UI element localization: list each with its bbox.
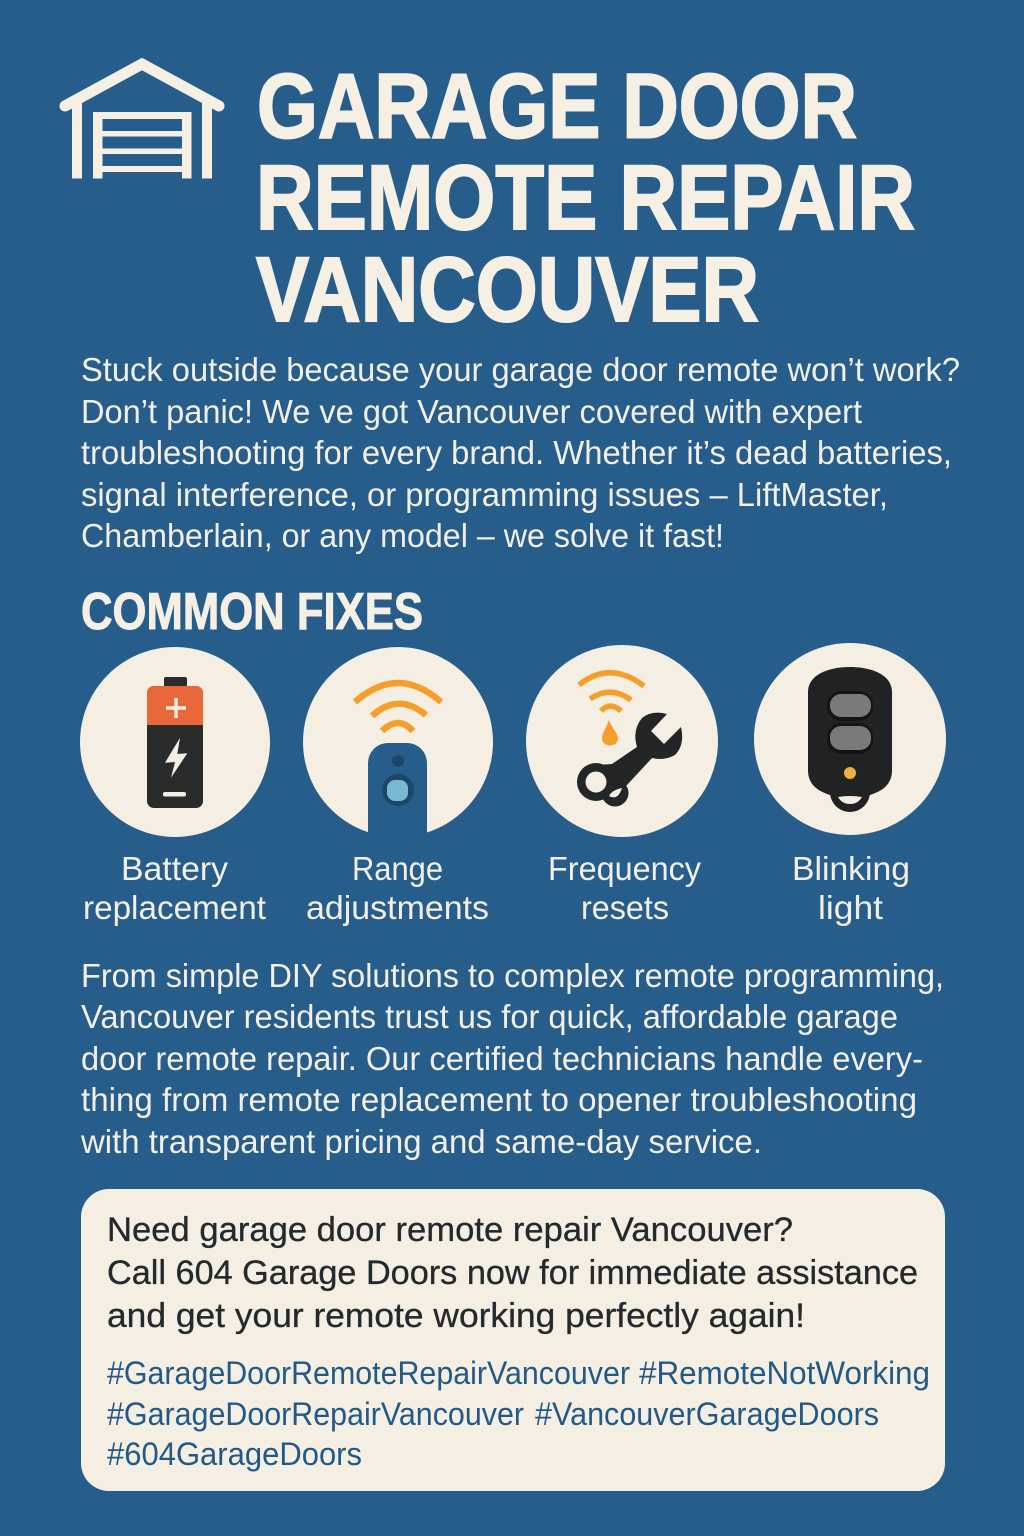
label: range adjustments: Range [352, 851, 443, 888]
icon: battery [80, 647, 270, 837]
panel: frequency resets [526, 645, 718, 927]
icon: signal and wrench [526, 645, 718, 837]
hashtags: #RemoteNotWorking [639, 1355, 930, 1391]
hashtags: #604GarageDoors [107, 1436, 362, 1472]
text block: introduction: Don’t panic! We ve got Vancouver covered with expert [81, 394, 863, 431]
hashtags: #GarageDoorRemoteRepairVancouver [107, 1355, 630, 1391]
label: frequency resets [548, 851, 701, 927]
title: REMOTE REPAIR [256, 147, 915, 249]
text block: services: thing from remote replacement to opener troubleshooting [81, 1082, 917, 1119]
title: VANCOUVER [256, 239, 759, 341]
label: frequency resets: Frequency [548, 851, 701, 888]
call to action text: Need garage door remote repair Vancouver? [107, 1211, 793, 1249]
text block: services: with transparent pricing and same-day service. [80, 1124, 762, 1161]
hashtags [107, 1355, 930, 1472]
text block: services: Vancouver residents trust us for quick, affordable garage [81, 999, 898, 1036]
icon: key fob [754, 643, 946, 835]
text block: introduction: Chamberlain, or any model – we solve it fast! [81, 518, 724, 555]
text block: services: door remote repair. Our certified technicians handle every- [81, 1041, 923, 1078]
text block: introduction: troubleshooting for every brand. Whether it’s dead batteries, [81, 435, 952, 472]
title: GARAGE DOOR [257, 56, 857, 158]
panel: call to action [81, 1189, 945, 1491]
icon: garage [65, 64, 219, 178]
title [256, 56, 915, 341]
text block: introduction: signal interference, or programming issues – LiftMaster, [81, 477, 888, 514]
label: blinking light: Blinking [792, 851, 910, 888]
call to action text: Call 604 Garage Doors now for immediate assistance [107, 1254, 918, 1292]
label: range adjustments: adjustments [306, 890, 489, 927]
label: frequency resets: resets [581, 890, 669, 927]
call to action text [107, 1211, 918, 1335]
text block: introduction [81, 352, 960, 555]
panel: battery replacement [80, 647, 270, 927]
icon: remote with signal [303, 647, 493, 840]
text block: introduction: Stuck outside because your garage door remote won’t work? [81, 352, 960, 389]
label: battery replacement: Battery [121, 851, 228, 888]
panel: blinking light [754, 643, 946, 927]
call to action text: and get your remote working perfectly again! [107, 1297, 805, 1335]
heading: common fixes: COMMON FIXES [81, 583, 423, 641]
hashtags: #VancouverGarageDoors [535, 1396, 879, 1432]
label: battery replacement: replacement [83, 890, 267, 927]
panel: range adjustments [303, 647, 493, 927]
callout background [81, 1189, 945, 1491]
text block: services: From simple DIY solutions to complex remote programming, [81, 958, 944, 995]
label: battery replacement [83, 851, 267, 927]
hashtags: #GarageDoorRepairVancouver [107, 1396, 524, 1432]
label: blinking light: light [818, 890, 884, 927]
label: blinking light [792, 851, 910, 927]
text block: services [80, 958, 944, 1161]
label: range adjustments [306, 851, 489, 927]
